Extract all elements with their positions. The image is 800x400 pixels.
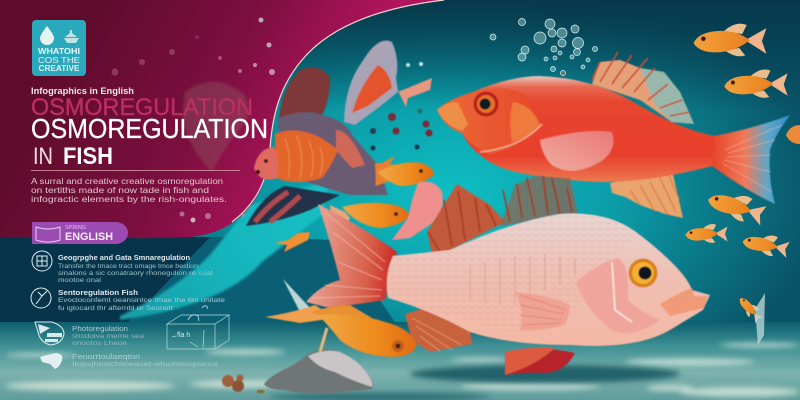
- intro paragraph: infogractic elements by the rish-ongulates.: [31, 195, 227, 204]
- school of small orange fish: [685, 24, 800, 345]
- title block: Infographics in English: [31, 86, 134, 97]
- dorsal fin: [592, 60, 694, 124]
- big red fish: [437, 52, 790, 218]
- language pill: SPRING: [65, 225, 86, 231]
- list item: photoregulation: Photoregulation: [72, 326, 128, 333]
- title block: FISH: [63, 143, 113, 170]
- tail: [306, 204, 397, 308]
- rising bubbles: [490, 18, 598, 76]
- orange fish foreground: [265, 279, 417, 357]
- gill plate: [510, 102, 540, 142]
- intro paragraph: on tertiths made of now tade in fish and: [31, 186, 209, 195]
- pebbles: [222, 374, 264, 393]
- eye: [628, 258, 658, 288]
- list item: geography and data: Geogrpghe and Gata Smnaregulation: [58, 255, 190, 262]
- list item: fenoregulation: [40, 353, 218, 369]
- title block: [31, 86, 268, 171]
- lips: [437, 102, 468, 131]
- rock: [264, 349, 373, 393]
- big pink fish: [306, 176, 710, 375]
- body: [387, 213, 710, 346]
- falling pellets: [370, 62, 432, 150]
- head: [437, 88, 540, 155]
- logo badge: WHATOHI: [38, 47, 80, 56]
- list item: osmoregulation fish: [31, 288, 225, 312]
- gold fish beside centre: [275, 156, 443, 252]
- title block: OSMOREGULATION: [31, 94, 253, 121]
- icon: fish swimmer: [31, 288, 51, 308]
- wireframe aquarium tank: fla h: [177, 332, 190, 339]
- list item: geography and data: mootoe onal: [58, 277, 102, 284]
- list item: photoregulation: [35, 322, 145, 347]
- seabed with light patches: [0, 322, 800, 400]
- surreal central fish: [246, 41, 432, 226]
- title block: OSMOREGULATION: [31, 113, 268, 144]
- icon: fish mark: [40, 353, 62, 369]
- list item: photoregulation: onootos Lheoe: [72, 341, 128, 347]
- logo badge: COS THE: [38, 56, 80, 65]
- anal fin: [405, 306, 472, 352]
- list item: osmoregulation fish: fu igtocard thr afternbl or Seonett: [58, 305, 173, 312]
- list item: fenoregulation: Itopsjhestchlineaset-wluohiooqoanur: [72, 362, 218, 368]
- body: [437, 76, 715, 182]
- gill plate: [576, 258, 660, 333]
- title block: IN: [33, 143, 53, 170]
- icon: data badge: [32, 251, 52, 271]
- list item: fenoregulation: Fenorrtoulaeqtnn: [72, 354, 140, 361]
- logo badge: [32, 20, 86, 76]
- list item: geography and data: Transfer the tmace tract omage tmce bestion: [58, 263, 198, 270]
- language pill: [32, 222, 128, 244]
- dorsal fin: [427, 184, 505, 254]
- pectoral fin: [515, 292, 570, 330]
- language pill: ENGLISH: [65, 231, 113, 243]
- list item: osmoregulation fish: Evocloconfemt oeansintce tmae the tim unitate: [58, 297, 225, 304]
- tail: [708, 115, 790, 204]
- ghost fish and bubbles on panel: [112, 18, 275, 222]
- icon: fish emblem: [35, 322, 64, 345]
- lips: [660, 288, 708, 316]
- list item: photoregulation: shodolva meme sea: [72, 334, 145, 340]
- pectoral fin: [540, 131, 614, 171]
- intro paragraph: A surral and creative creative osmoregulation: [31, 177, 223, 186]
- left title panel: [0, 0, 444, 238]
- list item: osmoregulation fish: Sentoregulation Fish: [58, 290, 138, 297]
- belly fin: [505, 349, 575, 375]
- list item: geography and data: [32, 251, 213, 284]
- eye: [474, 92, 498, 116]
- list item: geography and data: sinalons a sic conatraory rhonegulion re coat: [58, 270, 213, 277]
- wireframe aquarium tank: [167, 306, 229, 349]
- intro paragraph: [31, 177, 227, 204]
- anal fin: [610, 170, 683, 218]
- logo badge: CREATIVE: [38, 64, 80, 73]
